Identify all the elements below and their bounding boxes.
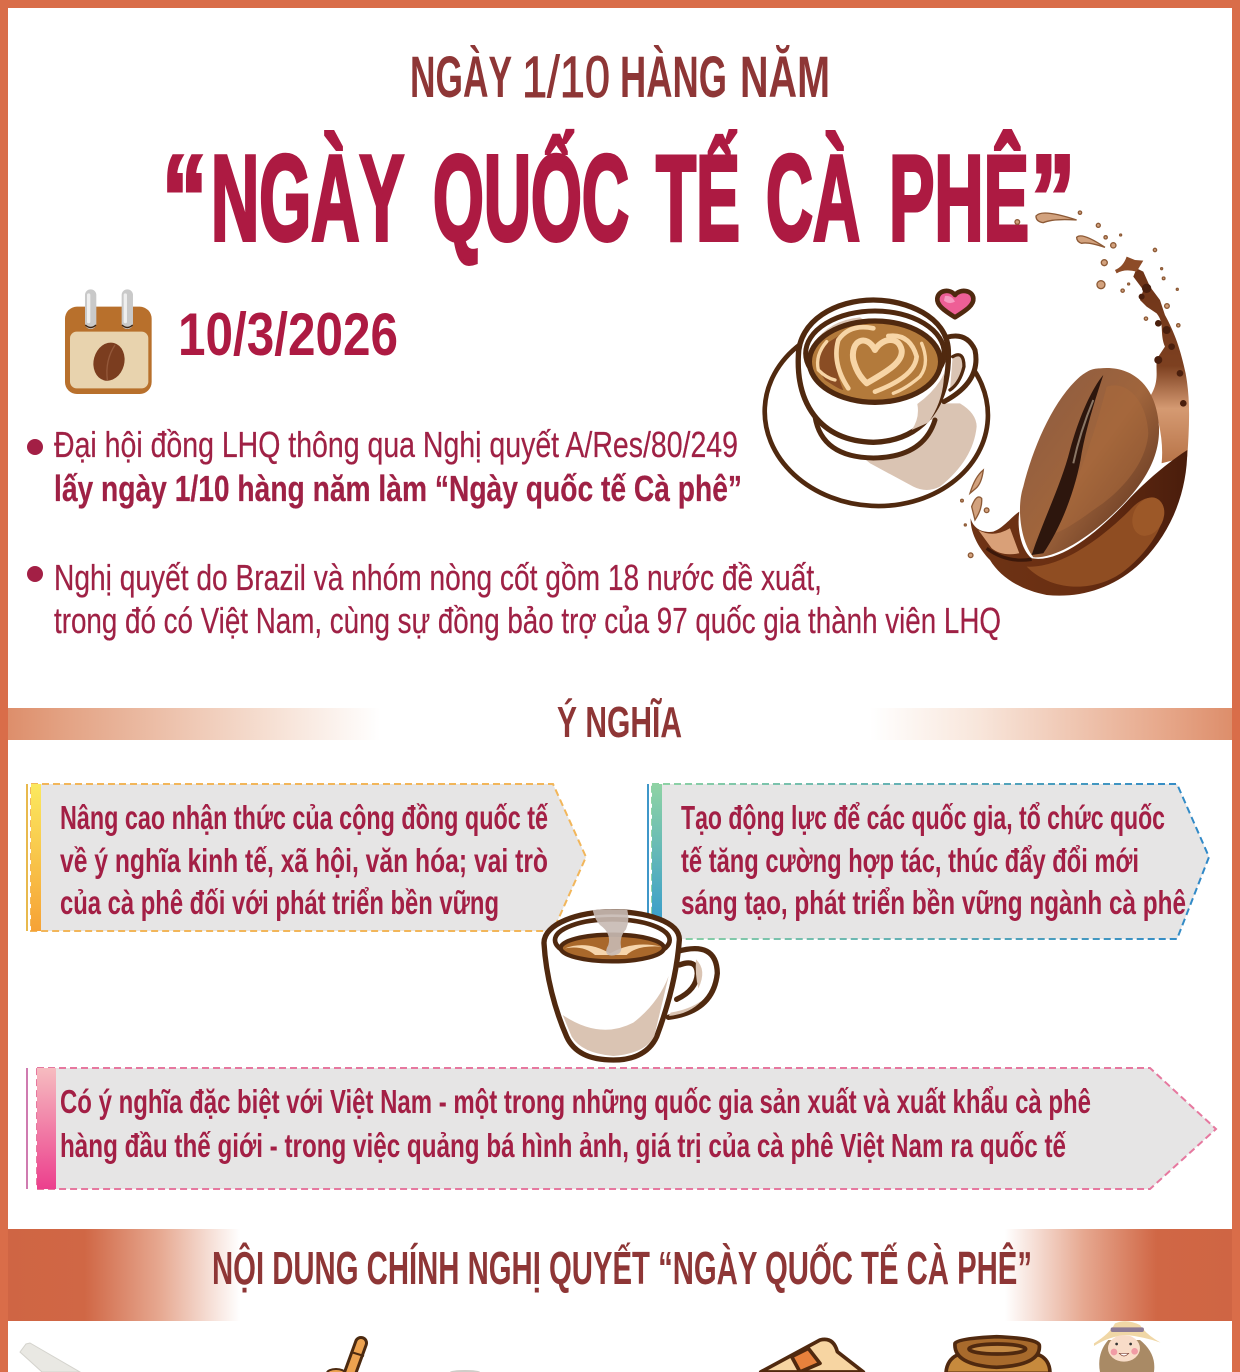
rising splash (1133, 268, 1189, 463)
bullet 1 (27, 439, 43, 455)
heart (937, 291, 973, 317)
cup body (798, 300, 948, 442)
title line 2: TẾ (656, 130, 740, 266)
title line 2: CÀ (766, 130, 860, 266)
inner rim (806, 311, 944, 396)
icon: coffee cup (544, 909, 717, 1060)
awareness line 1: Nâng cao nhận thức của cộng đồng quốc tế (60, 799, 548, 836)
steam (593, 909, 628, 956)
title line 2: PHÊ (889, 130, 1029, 266)
title line 2: NGÀY (211, 130, 404, 266)
cup handle (668, 949, 717, 1017)
cup shade (563, 976, 669, 1056)
title line 1 (410, 45, 830, 110)
coffee (561, 935, 664, 961)
title (162, 45, 1075, 266)
title line 2: ” (1031, 130, 1075, 266)
bean crease (1032, 375, 1103, 555)
title line 2: QUỐC (433, 130, 629, 266)
title line 1: HÀNG (620, 45, 727, 110)
awareness line 2: về ý nghĩa kinh tế, xã hội, văn hóa; vai trò (60, 842, 548, 879)
handle (944, 336, 976, 402)
illustration: coffee bean with splash (961, 211, 1189, 596)
panel: cooperation (647, 784, 1209, 940)
coffee (809, 321, 941, 402)
bean body (1020, 368, 1159, 557)
bullet 2 line 1: Nghị quyết do Brazil và nhóm nòng cốt gồm 18 nước đề xuất, (54, 557, 822, 598)
panel: Vietnam significance (26, 1068, 1216, 1189)
icon: wooden barrel (946, 1337, 1050, 1372)
illustration: latte cup on saucer (760, 291, 993, 512)
bullet 1 line 2: lấy ngày 1/10 hàng năm làm “Ngày quốc tế Cà phê” (54, 468, 742, 509)
awareness line 3: của cà phê đối với phát triển bền vững (60, 884, 499, 921)
cup rim (555, 919, 670, 961)
heading: Ý nghĩa: Ý NGHĨA (557, 697, 682, 747)
band: main content heading (8, 1229, 1232, 1321)
title line 2: “ (162, 130, 207, 266)
title line 2 (162, 130, 1075, 266)
panel: awareness (26, 784, 586, 931)
bullet 1 line 1: Đại hội đồng LHQ thông qua Nghị quyết A/Res/80/249 (54, 424, 738, 465)
icon: rolled mat (761, 1339, 863, 1372)
coffee bowl splash (971, 450, 1187, 596)
droplets (961, 211, 1180, 558)
bullet 2 (27, 566, 43, 582)
date: 10/3/2026 (178, 301, 398, 368)
latte art (818, 327, 925, 393)
text block: resolution facts (27, 424, 1001, 641)
icon: woman in straw hat (1094, 1321, 1161, 1372)
icon: small grey item (450, 1370, 480, 1372)
bean highlight (1053, 385, 1148, 533)
band: Ý nghĩa (8, 697, 1232, 747)
icon row: cropped illustrations (20, 1321, 1161, 1372)
cup body (544, 912, 679, 1060)
title line 1: NGÀY (410, 45, 512, 110)
shadow (833, 403, 977, 490)
icon: paper scroll (20, 1343, 80, 1372)
saucer (760, 315, 993, 512)
icon: broom handle (327, 1343, 364, 1372)
cup foot (815, 417, 935, 458)
title line 1: 1/10 (522, 45, 610, 110)
title line 1: NĂM (740, 45, 830, 110)
icon: calendar with coffee bean (65, 295, 152, 394)
dark flecks (1139, 284, 1187, 407)
